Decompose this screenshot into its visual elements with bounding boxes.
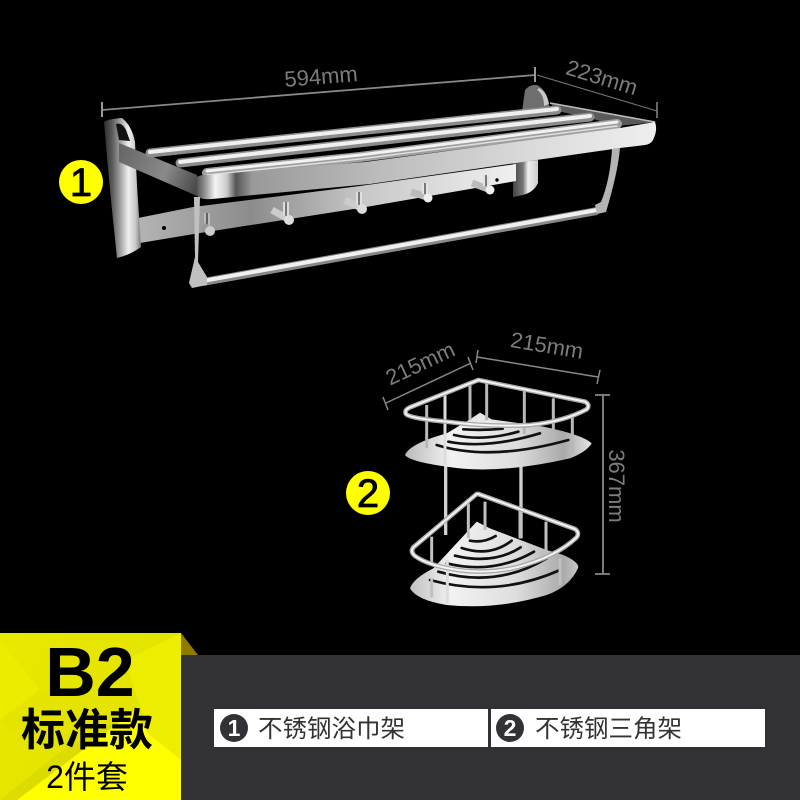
dimension: shelf right side <box>476 327 600 384</box>
item label 2 <box>491 709 765 747</box>
item label 1: 不锈钢浴巾架 <box>258 715 405 743</box>
right towel arm <box>595 148 620 214</box>
hook 3 <box>345 192 367 214</box>
marker 1 <box>59 160 103 205</box>
item label 1: 1 <box>228 715 241 741</box>
long rear posts <box>446 463 521 538</box>
top rails <box>150 109 617 175</box>
hook 1 <box>203 213 215 236</box>
yellow badge <box>0 633 181 800</box>
back rail and right corner <box>550 103 657 126</box>
dark bottom band <box>181 655 800 800</box>
dimension: shelf left side: 215mm <box>382 337 459 390</box>
left towel arm <box>189 197 207 288</box>
lower shelf <box>410 494 578 606</box>
item label 2: 不锈钢三角架 <box>535 715 682 743</box>
hook 4 <box>411 183 432 202</box>
dimension: shelf height <box>595 395 629 574</box>
corner shelf product <box>405 380 592 606</box>
dimension: rack depth: 223mm <box>563 55 641 100</box>
dimension: rack depth <box>537 55 657 118</box>
left side rail <box>119 143 197 196</box>
dimension: shelf right side: 215mm <box>509 327 585 364</box>
right wall bracket <box>513 85 549 197</box>
towel bar <box>203 210 597 282</box>
yellow fold <box>181 633 198 655</box>
badge title: 标准款 <box>21 706 153 755</box>
bracket cut-out <box>116 124 130 141</box>
dimension: rack width <box>102 61 535 117</box>
hook 2 <box>272 202 294 225</box>
left wall bracket <box>104 118 141 258</box>
upper shelf <box>405 380 592 469</box>
marker 2 <box>346 471 390 516</box>
front rail <box>197 122 656 199</box>
hook bar <box>138 164 516 243</box>
mounting holes <box>162 178 499 230</box>
marker 2: 2 <box>357 472 379 516</box>
towel rack product <box>104 85 657 288</box>
hook 5 <box>472 175 494 194</box>
hooks <box>203 175 494 236</box>
marker 1: 1 <box>70 161 92 205</box>
badge code: B2 <box>45 633 135 711</box>
dimension: shelf height: 367mm <box>604 449 629 523</box>
badge subtitle: 2件套 <box>46 759 128 795</box>
dimension: rack width: 594mm <box>283 61 359 92</box>
item label 1 <box>214 709 488 747</box>
dimension: shelf left side <box>382 337 473 410</box>
item label 2: 2 <box>504 715 516 741</box>
